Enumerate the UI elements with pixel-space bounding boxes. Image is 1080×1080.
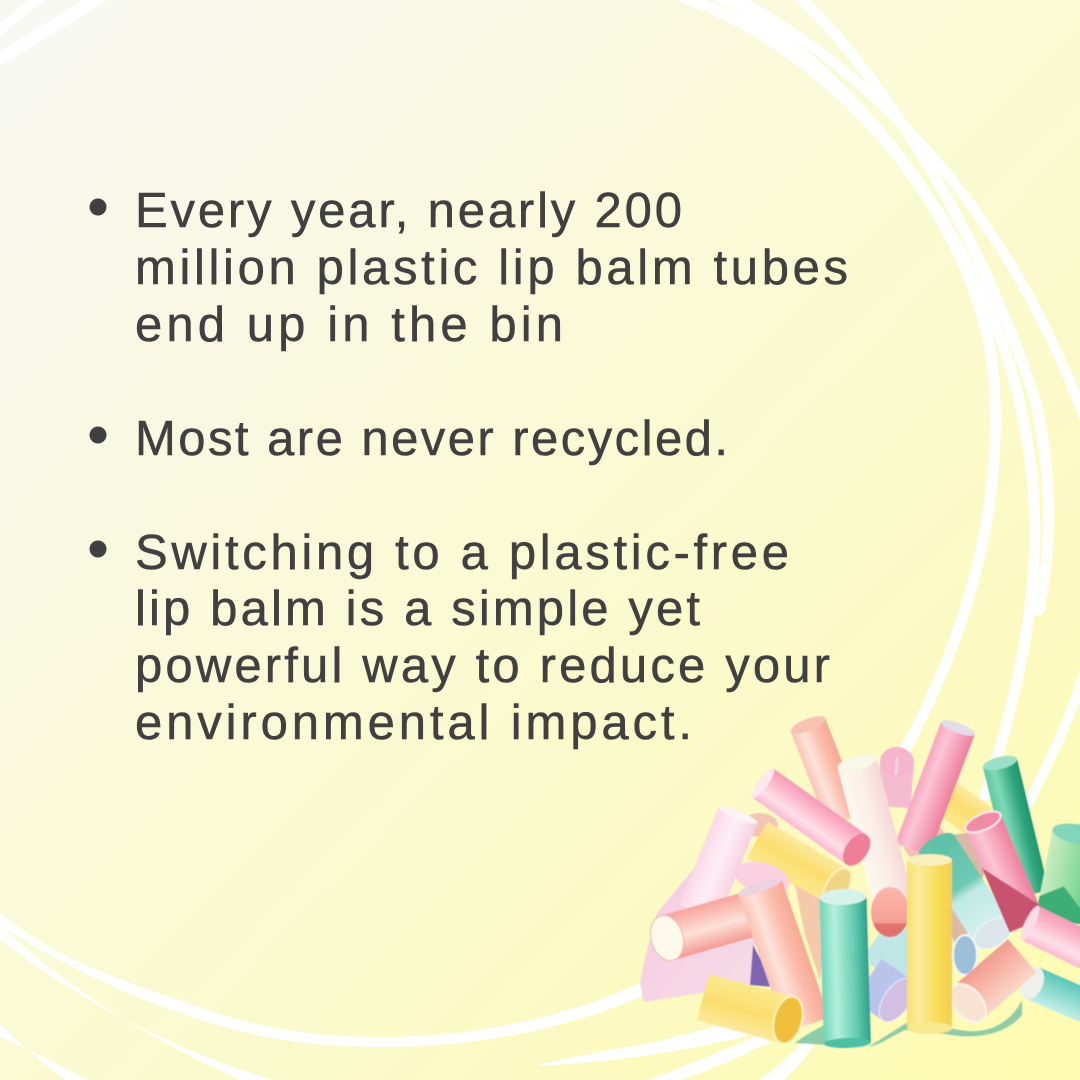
long pink tube xyxy=(895,717,977,856)
decorative white arcs: top-left corner xyxy=(0,0,108,66)
lime green tube xyxy=(1036,819,1080,927)
mustard yellow tube xyxy=(746,822,857,911)
bullet 3 xyxy=(90,526,830,750)
right teal tube xyxy=(1015,963,1080,1029)
bullet 3: Switching to a plastic-free xyxy=(135,526,789,580)
illustration: pile of pastel lip balm tubes xyxy=(640,713,1080,1049)
teal to pale tube xyxy=(914,827,1018,956)
small pink tube xyxy=(731,856,793,900)
decorative white arcs: top and right xyxy=(682,0,1080,810)
pale pink upper-left tube xyxy=(679,803,759,920)
low yellow tube xyxy=(697,974,808,1047)
peach lower-right tube xyxy=(943,939,1037,1029)
bullet 1: Every year, nearly 200 xyxy=(135,184,682,238)
tall yellow tube xyxy=(907,854,952,1034)
bullet list xyxy=(90,184,848,750)
salmon tube xyxy=(789,713,862,827)
tan wedge xyxy=(795,885,830,980)
pink open-top tube xyxy=(962,807,1045,932)
bullet 1: million plastic lip balm tubes xyxy=(135,241,848,295)
bullet 3: environmental impact. xyxy=(135,696,692,750)
peach blob behind pile xyxy=(903,822,947,862)
cream long tube xyxy=(836,751,913,908)
right pink tube xyxy=(1017,904,1080,975)
bullet 1 xyxy=(90,184,848,352)
dark green tube xyxy=(982,753,1049,898)
mauve tube xyxy=(877,746,915,808)
pale pink back sheet xyxy=(640,855,756,1002)
tan behind teal tube xyxy=(940,832,985,960)
tall teal tube xyxy=(819,888,871,1049)
blue end cap xyxy=(953,935,977,975)
bullet 3: lip balm is a simple yet xyxy=(135,582,700,636)
pale blue tube behind xyxy=(868,925,915,990)
coral tube with cream end xyxy=(645,893,753,965)
pink open tube xyxy=(748,765,876,871)
big salmon tube xyxy=(737,875,829,1033)
decorative white arcs: bottom xyxy=(0,912,815,1080)
peach ball xyxy=(871,887,909,937)
bullet 3: powerful way to reduce your xyxy=(135,639,830,693)
lilac tube xyxy=(853,959,922,1028)
tan behind yellow tube xyxy=(742,813,778,837)
ground shadows xyxy=(795,1000,1022,1047)
purple shadow xyxy=(750,945,775,987)
back yellow tube xyxy=(934,781,992,838)
bullet 1: end up in the bin xyxy=(135,298,563,352)
bullet 2: Most are never recycled. xyxy=(135,412,728,466)
